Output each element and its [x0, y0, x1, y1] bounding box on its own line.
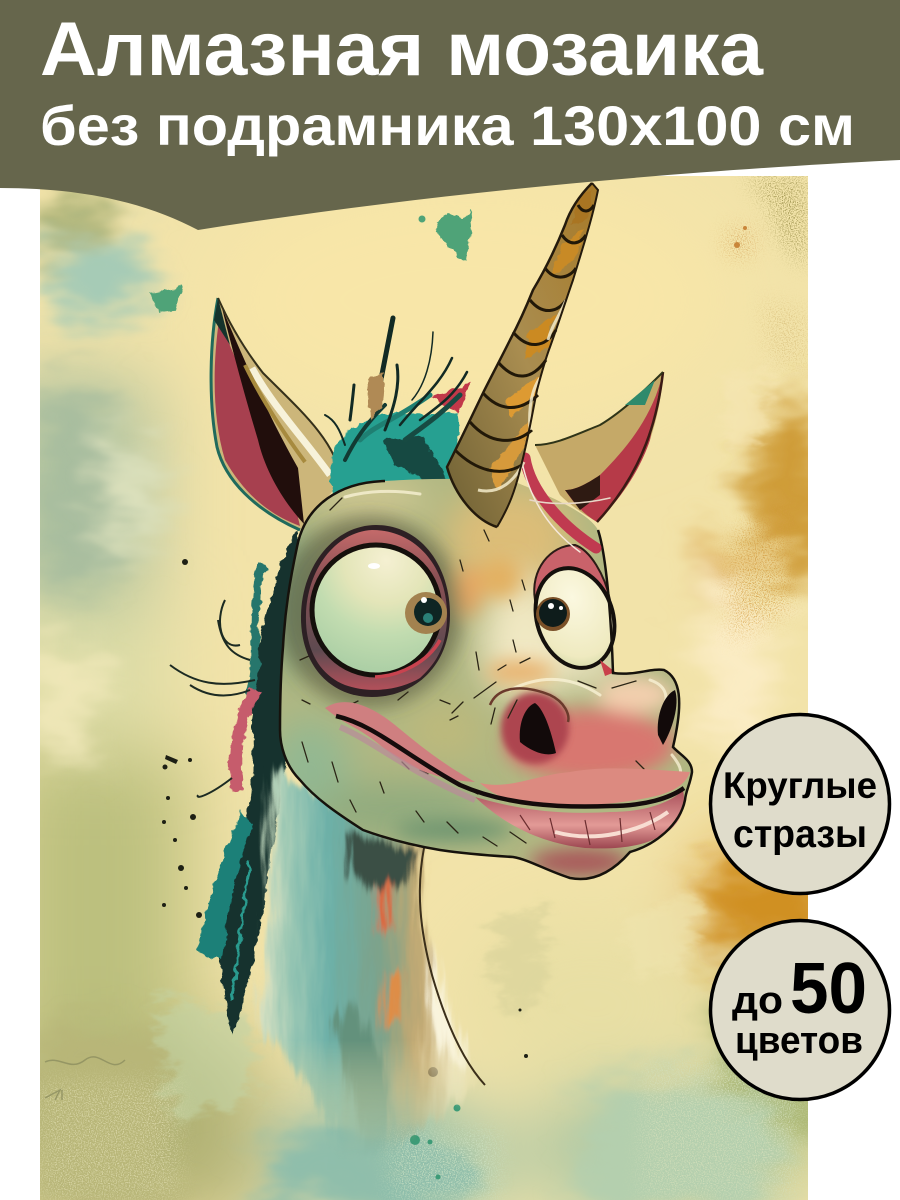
header banner [0, 0, 900, 230]
paint splashes [148, 210, 747, 1180]
lips [325, 702, 690, 848]
title: Алмазная мозаика [40, 7, 764, 92]
right eye [523, 545, 627, 678]
badge: round rhinestones [710, 714, 890, 894]
mane mass [198, 530, 298, 1035]
neck paint [258, 770, 480, 1161]
head colouring [270, 470, 700, 890]
badge: up to 50 colours: 50 [790, 949, 867, 1029]
badge: round rhinestones: Круглые [723, 765, 877, 806]
left eye [301, 525, 450, 697]
head [270, 470, 700, 890]
badge: up to 50 colours [710, 920, 890, 1100]
mane teal mass [330, 382, 472, 495]
neck [258, 770, 485, 1161]
subtitle: без подрамника 130х100 см [40, 94, 855, 157]
left ear [211, 298, 342, 530]
mane behind neck [170, 530, 298, 1035]
highlight strokes [345, 491, 681, 778]
top mane [325, 318, 472, 495]
badge: up to 50 colours: до [732, 980, 783, 1022]
right ear [535, 372, 663, 522]
horn [447, 183, 598, 527]
badge: round rhinestones: стразы [733, 813, 867, 856]
head outline [280, 481, 692, 879]
fur hatching [300, 492, 644, 846]
pink strands [522, 458, 610, 552]
badge: up to 50 colours: цветов [735, 1020, 863, 1062]
nostrils [520, 690, 677, 754]
signature [45, 1057, 125, 1100]
snout outline [490, 688, 568, 722]
